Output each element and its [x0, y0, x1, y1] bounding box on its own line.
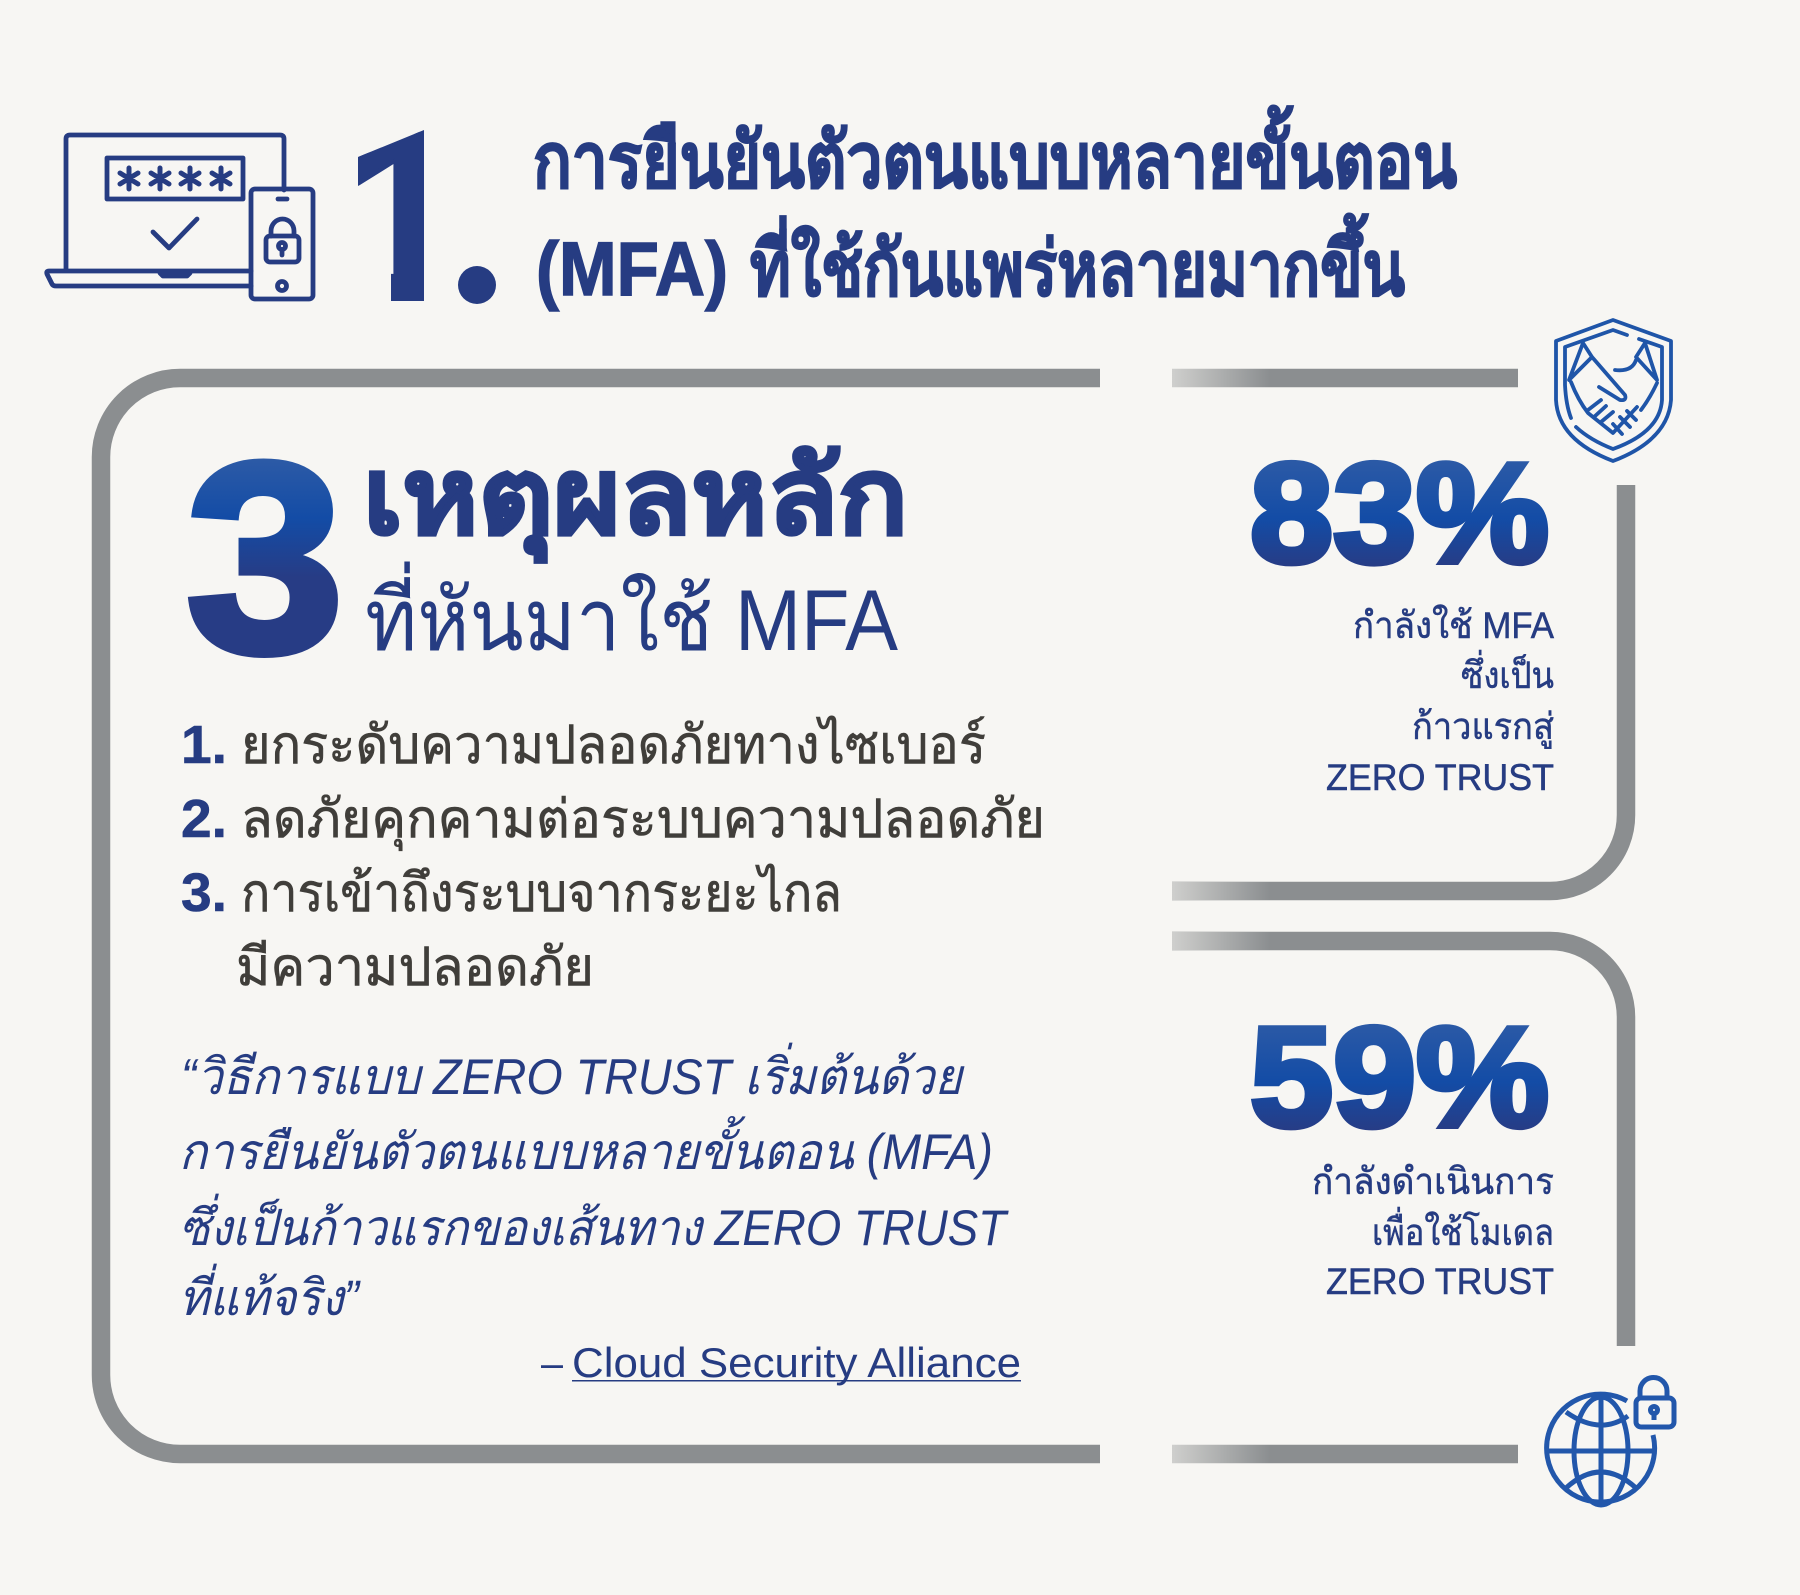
icon: laptop and phone with password — [47, 135, 313, 299]
title: การยืนยันตัวตนแบบหลายขั้นตอน — [533, 105, 1457, 204]
panel: main frame — [101, 378, 1626, 1454]
list of reasons: 2. — [181, 789, 227, 849]
heading: reasons — [363, 438, 908, 669]
frame fade overlays — [1172, 882, 1270, 950]
attribution: – — [541, 1339, 564, 1386]
stat caption: 59% — [1312, 1161, 1554, 1302]
section number: 1 — [338, 79, 475, 354]
stat caption: 83%: กำลังใช้ MFA — [1353, 604, 1554, 646]
list of reasons: 3. — [181, 863, 227, 923]
icon: globe with lock — [1547, 1378, 1674, 1505]
heading: reasons: ที่หันมาใช้ MFA — [365, 561, 899, 669]
title: (MFA) — [536, 227, 728, 312]
list of reasons: ลดภัยคุกคามต่อระบบความปลอดภัย — [241, 790, 1045, 851]
list of reasons: มีความปลอดภัย — [236, 938, 594, 997]
stat caption: 83%: ซึ่งเป็น — [1461, 649, 1554, 696]
title: ที่ใช้กันแพร่หลายมากขึ้น — [750, 213, 1405, 312]
heading: big 3: 3 — [186, 408, 344, 709]
title — [533, 105, 1457, 312]
stat caption: 83% — [1326, 604, 1554, 798]
stat: 59%: 59% — [1250, 998, 1549, 1157]
list of reasons — [181, 715, 1045, 997]
stat caption: 59%: เพื่อใช้โมเดล — [1372, 1206, 1554, 1253]
stat caption: 59%: กำลังดำเนินการ — [1312, 1161, 1554, 1202]
stat caption: 83%: ZERO TRUST — [1326, 757, 1554, 798]
list of reasons: 1. — [181, 715, 227, 775]
quote: การยืนยันตัวตนแบบหลายขั้นตอน (MFA) — [179, 1116, 993, 1180]
stat: 83%: 83% — [1250, 434, 1549, 593]
stat caption: 59%: ZERO TRUST — [1326, 1261, 1554, 1302]
quote: ซึ่งเป็นก้าวแรกของเส้นทาง ZERO TRUST — [179, 1193, 1009, 1256]
icon: handshake shield — [1556, 320, 1671, 461]
quote: “วิธีการแบบ ZERO TRUST เริ่มต้นด้วย — [181, 1042, 965, 1105]
section number — [358, 130, 496, 304]
attribution: Cloud Security Alliance — [572, 1339, 1021, 1386]
stat caption: 83%: ก้าวแรกสู่ — [1412, 706, 1554, 749]
quote — [179, 1042, 1009, 1326]
list of reasons: ยกระดับความปลอดภัยทางไซเบอร์ — [241, 715, 986, 775]
quote: ที่แท้จริง” — [179, 1263, 361, 1326]
list of reasons: การเข้าถึงระบบจากระยะไกล — [241, 863, 842, 923]
heading: reasons: เหตุผลหลัก — [363, 438, 908, 563]
